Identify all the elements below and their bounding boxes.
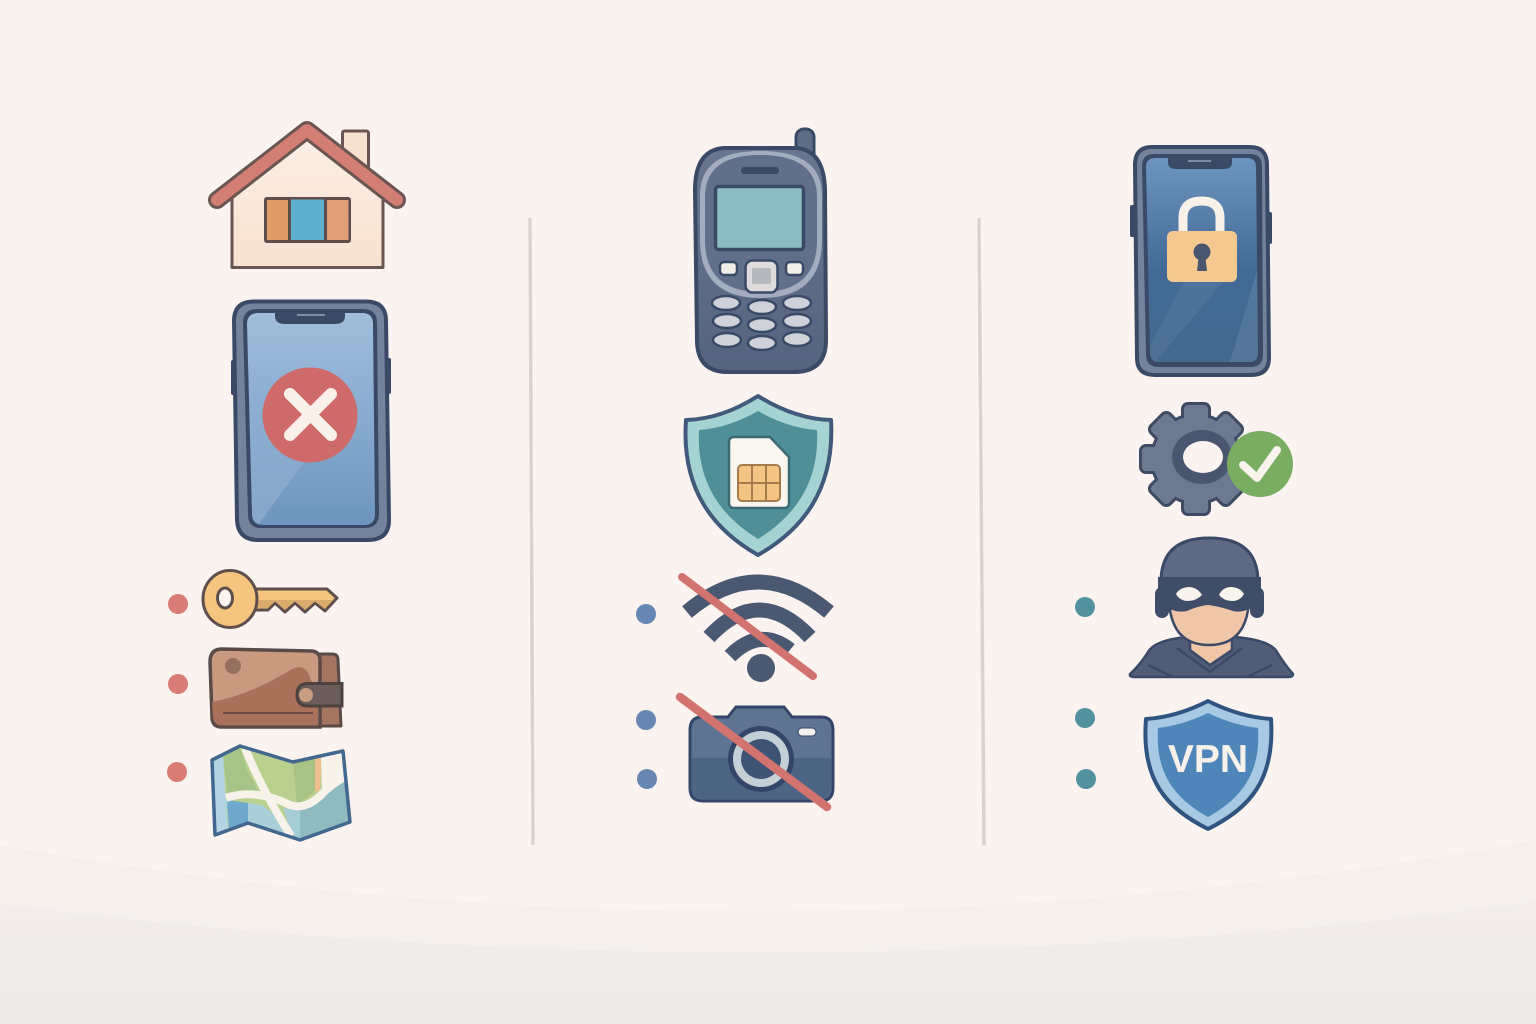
panel: left column <box>167 130 397 840</box>
bullet: camera bottom <box>637 769 657 789</box>
icon: house <box>217 130 397 268</box>
icon: VPN shield: VPN <box>1168 738 1248 781</box>
icon: key <box>203 570 337 628</box>
bullet: key <box>168 594 188 614</box>
icon: VPN shield <box>1145 701 1271 829</box>
bullet: thief <box>1075 597 1095 617</box>
bullet: VPN top <box>1075 708 1095 728</box>
icon: masked thief <box>1130 538 1293 677</box>
icon: feature phone <box>695 129 826 372</box>
icon: smartphone with padlock <box>1130 147 1272 375</box>
icon: camera crossed out <box>680 697 833 807</box>
bullet: wallet <box>168 674 188 694</box>
icon: gear with green check <box>1142 405 1293 513</box>
bullet: wifi <box>636 604 656 624</box>
panel: middle column <box>636 129 833 807</box>
panel: right column <box>1075 147 1293 829</box>
icon: smartphone with red cross <box>231 302 391 540</box>
icon: shield with SIM card <box>685 396 831 555</box>
bullet: VPN bottom <box>1076 769 1096 789</box>
icon: folded map <box>212 746 350 840</box>
bullet: camera top <box>636 710 656 730</box>
bullet: map <box>167 762 187 782</box>
icon: wallet <box>210 649 342 727</box>
icon: wifi crossed out <box>682 577 829 682</box>
